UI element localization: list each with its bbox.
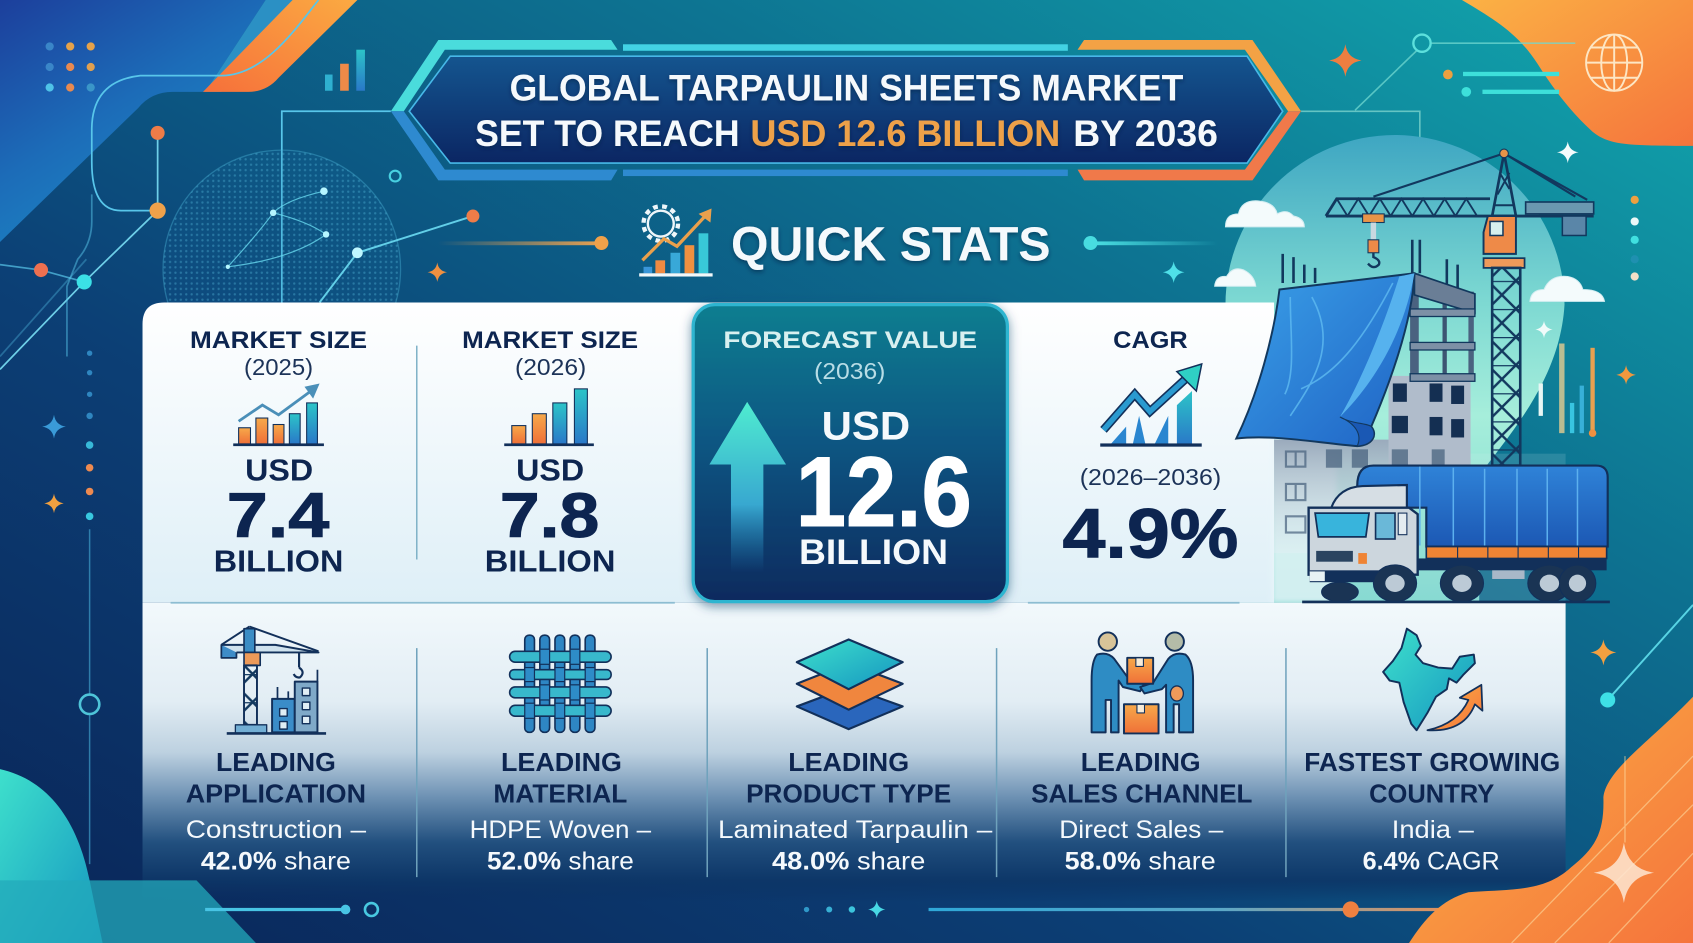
stat: leading application xyxy=(186,627,366,876)
nodes on left circuit xyxy=(34,126,166,289)
stat: leading material: 52.0% share xyxy=(487,849,634,876)
stat: leading material: MATERIAL xyxy=(493,781,627,809)
stat: leading application: APPLICATION xyxy=(186,781,366,809)
icon: growth arrow xyxy=(1100,364,1202,447)
card: forecast value: BILLION xyxy=(799,532,948,572)
stat: CAGR: 4.9% xyxy=(1062,494,1238,572)
stat: leading product type: Laminated Tarpaulin – xyxy=(718,817,992,844)
top-right orange blob xyxy=(1462,0,1693,146)
icon: clouds xyxy=(1215,201,1604,301)
illustration backdrop dome xyxy=(1225,135,1566,603)
horizontal dividers xyxy=(171,602,1240,604)
bottom-left teal blob xyxy=(0,769,256,943)
title line 1: GLOBAL TARPAULIN SHEETS MARKET xyxy=(510,67,1184,108)
stat: leading material: HDPE Woven – xyxy=(470,817,651,844)
left decoration column xyxy=(42,351,99,864)
icon: small bars top xyxy=(325,50,365,91)
stat: market size 2026: MARKET SIZE xyxy=(462,327,638,354)
icon: rising bars xyxy=(504,389,594,446)
stat: market size 2026: (2026) xyxy=(515,354,586,380)
quick stats heading: QUICK STATS xyxy=(731,217,1051,271)
stat: fastest growing country: 6.4% CAGR xyxy=(1363,849,1500,876)
stat: leading sales channel: 58.0% share xyxy=(1065,849,1216,876)
stat: fastest growing country: FASTEST GROWING xyxy=(1304,749,1560,777)
icon: globe xyxy=(1586,35,1642,91)
stat: market size 2025: BILLION xyxy=(214,545,343,578)
icon: bars with arrow xyxy=(233,383,324,446)
stat: market size 2026 xyxy=(462,327,638,578)
bottom-right accents xyxy=(1512,605,1693,943)
stat: leading sales channel: LEADING xyxy=(1081,749,1201,777)
illustration: tarpaulin sheet xyxy=(1236,273,1414,446)
stat: leading material: LEADING xyxy=(501,749,622,777)
dots grid xyxy=(46,42,95,92)
stat: market size 2025: MARKET SIZE xyxy=(190,327,367,354)
stat: market size 2025: (2025) xyxy=(244,354,313,380)
stat: leading application: LEADING xyxy=(216,749,336,777)
stat: market size 2026: USD xyxy=(516,455,584,488)
title line 2: USD 12.6 BILLION xyxy=(750,113,1060,154)
stat: leading sales channel: SALES CHANNEL xyxy=(1031,781,1253,809)
panel: top stats xyxy=(143,302,1337,603)
icon: gear and chart xyxy=(639,206,713,277)
banner: title xyxy=(391,40,1301,180)
card: forecast value: 12.6 xyxy=(796,437,972,548)
top-left corner shapes xyxy=(0,0,357,242)
stat: leading product type: 48.0% share xyxy=(772,849,925,876)
stat: leading application: Construction – xyxy=(186,817,366,844)
stat: fastest growing country: India – xyxy=(1392,817,1474,844)
illustration: truck xyxy=(1302,466,1610,603)
stat: market size 2026: BILLION xyxy=(485,545,615,578)
dotted world globe xyxy=(163,150,401,388)
stat: leading sales channel xyxy=(1031,632,1253,876)
stat: CAGR xyxy=(1062,327,1238,572)
stat: leading product type: PRODUCT TYPE xyxy=(746,781,951,809)
vertical dividers lower xyxy=(417,648,1286,877)
network line with nodes xyxy=(320,210,479,302)
right dots column xyxy=(1631,196,1639,281)
bottom-right orange blob xyxy=(1409,697,1693,943)
panel: lower stats xyxy=(143,603,1566,902)
stat: leading product type xyxy=(718,639,992,876)
illustration: small chart right xyxy=(1535,321,1636,437)
icon: crane and building xyxy=(221,627,326,733)
title line 2: BY 2036 xyxy=(1073,113,1218,154)
stat: CAGR: (2026–2036) xyxy=(1080,464,1221,490)
stat: fastest growing country: COUNTRY xyxy=(1369,781,1494,809)
icon: handshake with boxes xyxy=(1092,632,1193,733)
left circuit lines xyxy=(0,0,391,369)
card: forecast value xyxy=(693,305,1007,602)
illustration: crane xyxy=(1326,149,1594,466)
illustration: building xyxy=(1274,240,1475,553)
ring and sparkle near banner xyxy=(390,171,447,282)
card: forecast value: (2036) xyxy=(814,358,885,384)
stat: leading material xyxy=(470,635,651,876)
stat: market size 2026: 7.8 xyxy=(500,481,599,551)
top-right connectors and sparkles xyxy=(1163,35,1579,283)
stat: leading sales channel: Direct Sales – xyxy=(1059,817,1224,844)
icon: woven fabric xyxy=(510,635,611,732)
icon: stacked layers xyxy=(797,639,903,729)
stat: market size 2025: USD xyxy=(245,455,313,488)
stat: market size 2025 xyxy=(190,327,367,578)
card: forecast value: USD xyxy=(822,405,910,449)
divider xyxy=(416,346,418,560)
stat: leading application: 42.0% share xyxy=(201,849,351,876)
card: forecast value: FORECAST VALUE xyxy=(723,327,977,354)
stat: leading product type: LEADING xyxy=(788,749,909,777)
stat: CAGR: CAGR xyxy=(1113,327,1188,354)
arrow: growth xyxy=(709,402,786,572)
quick stats heading xyxy=(438,206,1218,277)
stat: market size 2025: 7.4 xyxy=(227,481,330,551)
title line 2 xyxy=(475,113,1218,154)
stat: fastest growing country xyxy=(1304,629,1560,876)
title line 2: SET TO REACH xyxy=(475,113,740,154)
icon: India map with arrow xyxy=(1383,629,1482,730)
bottom decorations xyxy=(205,901,1458,918)
